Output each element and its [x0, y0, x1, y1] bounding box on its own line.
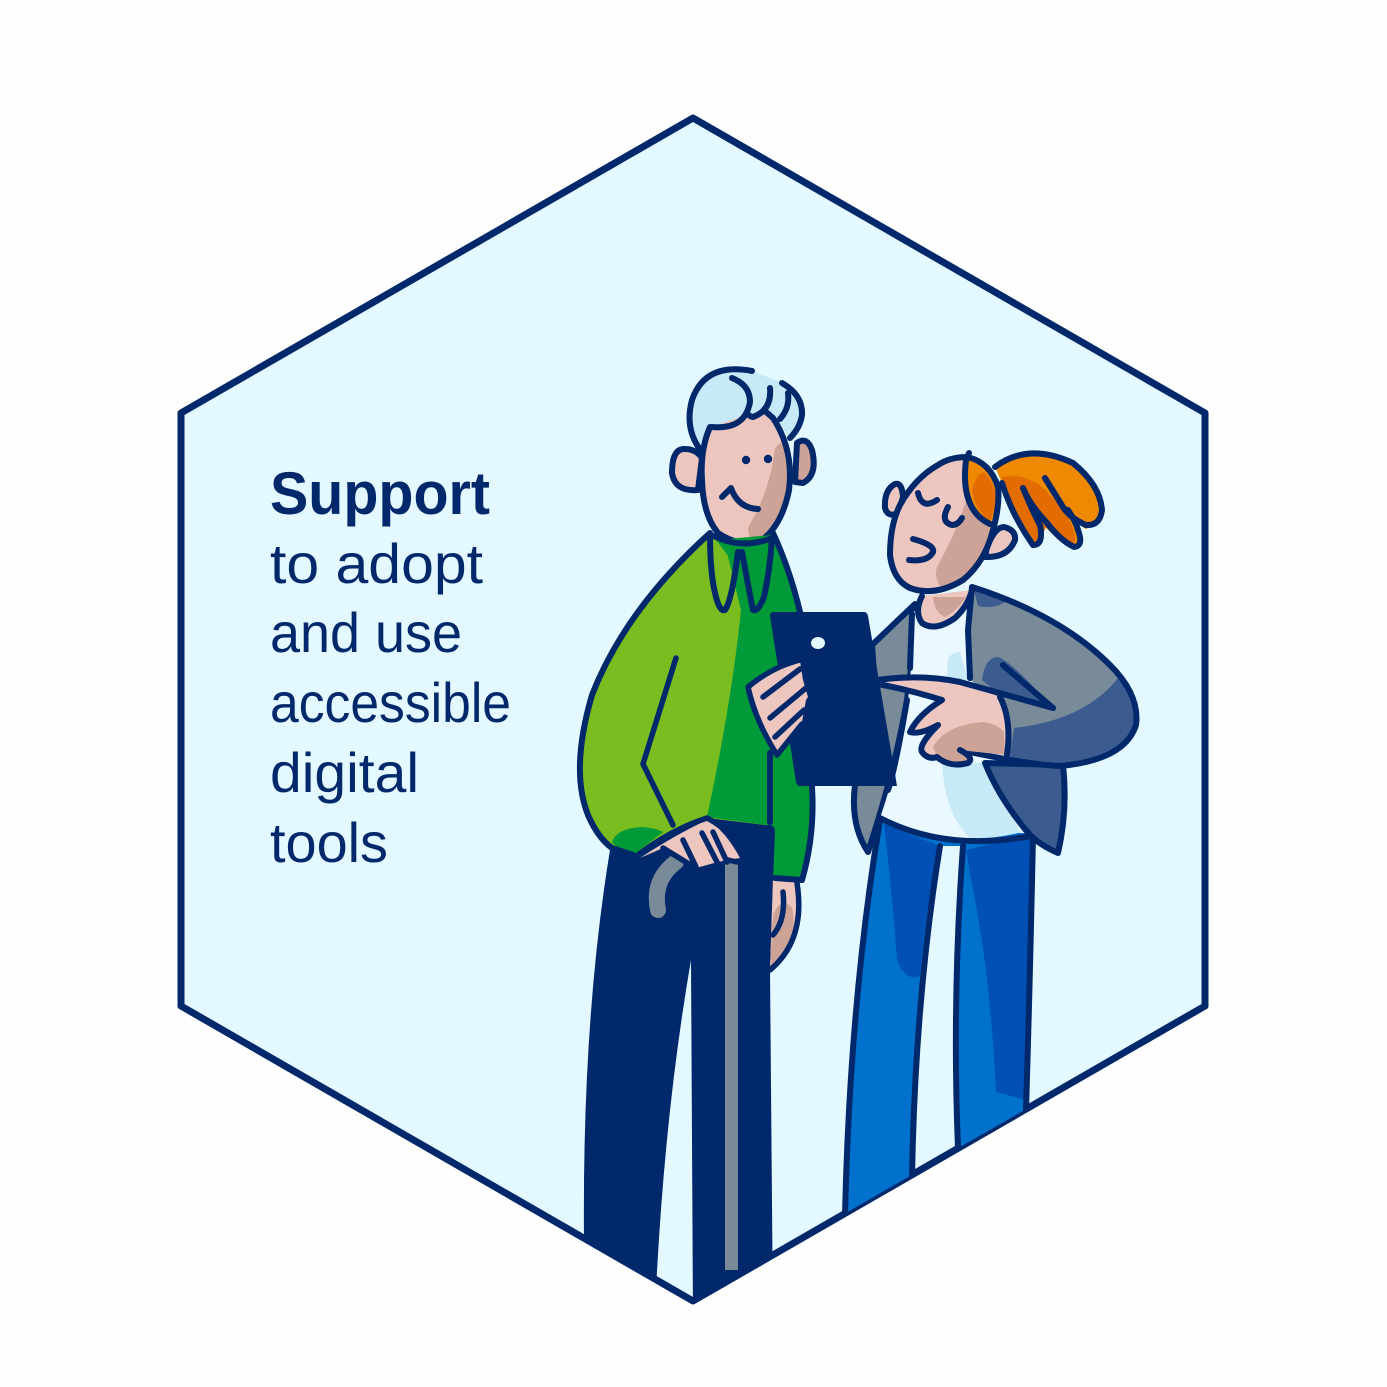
- shirt shadow: [942, 652, 1020, 838]
- woman's neck: [918, 590, 972, 627]
- hair outline: [690, 369, 802, 452]
- holding hand shape: [748, 661, 808, 755]
- tablet camera: [811, 637, 825, 649]
- woman's pointing hand: [878, 665, 1053, 765]
- face shadow: [748, 443, 789, 541]
- hand shadow: [933, 722, 1005, 764]
- sleeve outline: [960, 587, 1136, 766]
- ponytail base: [995, 453, 1102, 548]
- trousers waist overlap: [712, 825, 775, 880]
- jeans outline: [845, 820, 1033, 1215]
- jacket lower right: [985, 763, 1065, 853]
- woman's jeans: [845, 820, 1033, 1215]
- collar inner shadow: [716, 535, 772, 612]
- text: digital: digital: [270, 741, 419, 804]
- man's head: [702, 413, 790, 543]
- text: tools: tools: [270, 811, 388, 874]
- woman's mouth: [909, 539, 933, 560]
- text: accessible: accessible: [270, 671, 511, 734]
- man's eyes: [742, 455, 772, 464]
- neck outline: [918, 590, 972, 627]
- woman's hair ponytail: [995, 453, 1102, 548]
- sleeve crease: [643, 658, 676, 825]
- man's white hair: [690, 369, 800, 455]
- tablet body: [770, 612, 897, 786]
- jacket left panel: [854, 604, 915, 852]
- collar lines: [710, 535, 772, 610]
- woman's head outline: [890, 453, 998, 591]
- man's shirt collar: [710, 535, 772, 612]
- hair curls: [712, 378, 788, 427]
- shirt hem: [880, 818, 1030, 841]
- walking cane: [725, 862, 738, 1270]
- hand outline and fingers: [635, 818, 737, 867]
- man's trousers: [584, 815, 775, 1320]
- heading: Support: Support: [270, 460, 490, 527]
- man's left ear: [672, 449, 702, 490]
- hand outline: [878, 677, 1053, 765]
- woman's left ear: [885, 484, 903, 515]
- illustration: young woman pointing at tablet: [845, 453, 1137, 1215]
- man's smile: [722, 488, 758, 509]
- sweater hem shadow: [612, 827, 663, 855]
- man's lower hand: [770, 878, 799, 970]
- sweater shadow: [707, 533, 813, 880]
- lower hand shadow: [770, 903, 794, 968]
- woman's jacket sleeve: [968, 587, 1136, 766]
- tablet: [770, 612, 897, 786]
- heading and text block: [270, 460, 511, 874]
- crease shadow patch: [982, 657, 1053, 708]
- woman's hair front: [965, 460, 998, 524]
- text: and use: and use: [270, 601, 462, 664]
- woman's closed eyes: [918, 493, 962, 525]
- sleeve crease line: [1003, 665, 1053, 708]
- hand shape: [640, 820, 740, 868]
- shoulder shadow: [974, 590, 1008, 607]
- man's hand on cane: [635, 818, 740, 868]
- shirt inner line left: [888, 614, 912, 790]
- holding hand outline: [748, 660, 806, 755]
- sweater outline: [580, 533, 813, 880]
- text: to adopt: to adopt: [270, 532, 483, 595]
- woman's head: [890, 457, 998, 591]
- neck shadow: [933, 597, 966, 617]
- jeans shadow right leg: [966, 834, 1033, 1100]
- ponytail outline: [995, 453, 1102, 547]
- woman's face shadow: [936, 488, 995, 586]
- ponytail shadow: [1002, 476, 1075, 545]
- woman's white shirt: [880, 596, 1022, 838]
- illustration: older man with cane: [580, 369, 814, 1320]
- woman's right ear: [985, 527, 1015, 557]
- man's green sweater: [580, 533, 813, 880]
- hexagon panel background: [181, 118, 1205, 1301]
- cane handle: [657, 862, 676, 910]
- jeans shadow left leg: [884, 824, 940, 977]
- head outline: [702, 411, 790, 543]
- lower hand outline: [770, 883, 799, 970]
- man's right ear: [795, 441, 814, 483]
- man's hand holding tablet: [748, 660, 808, 755]
- hair front shadow: [972, 473, 996, 522]
- pointing hand shape: [878, 677, 1008, 765]
- sleeve shadow: [1010, 678, 1137, 766]
